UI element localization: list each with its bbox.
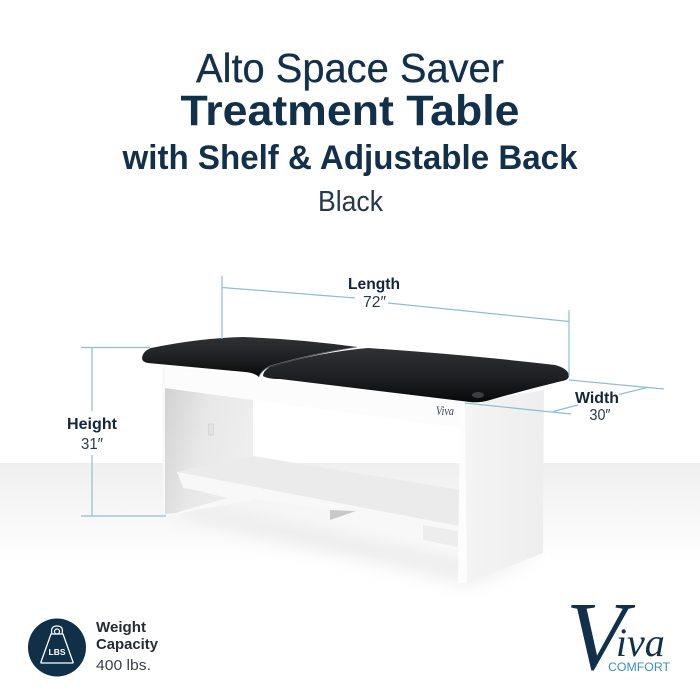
length dimension: [222, 276, 569, 376]
left leg inner face: [165, 388, 253, 514]
weight capacity: [28, 618, 159, 676]
wall plate: [208, 424, 214, 435]
logo script: V: [566, 583, 626, 691]
width dimension: [465, 380, 664, 424]
floor shadow: [175, 505, 540, 585]
title: [122, 45, 578, 218]
length value: 72″: [363, 294, 386, 311]
weight label: Weight: [96, 619, 146, 636]
brand logo: [566, 583, 670, 691]
height dimension: [67, 348, 166, 516]
right leg side face: [465, 390, 544, 583]
length lines: [222, 276, 569, 376]
right cushion: [263, 348, 569, 402]
left leg: [162, 366, 253, 516]
shelf front edge: [177, 472, 459, 547]
shelf block: [423, 525, 458, 547]
shelf support bracket: [330, 510, 356, 520]
title: Black: [318, 186, 383, 218]
height value: 31″: [81, 436, 103, 453]
title: Treatment Table: [180, 87, 520, 135]
weight value: 400 lbs.: [96, 657, 151, 674]
length label: Length: [348, 276, 400, 293]
treatment table: [142, 337, 569, 585]
title: Alto Space Saver: [196, 45, 504, 91]
width value: 30″: [590, 407, 611, 424]
shelf top: [177, 456, 460, 528]
logo comfort: COMFORT: [608, 662, 670, 674]
logo on apron: Viva: [436, 403, 454, 418]
icon: weight: LBS: [48, 647, 66, 657]
title: with Shelf & Adjustable Back: [122, 139, 578, 177]
right leg front edge: [458, 404, 467, 583]
height lines: [81, 348, 166, 516]
floor background: [0, 463, 700, 563]
height label: Height: [67, 416, 118, 433]
apron: [165, 366, 465, 428]
capacity label: Capacity: [96, 636, 159, 653]
cushion corner highlight: [472, 392, 484, 398]
width lines: [465, 380, 664, 414]
left cushion: [142, 337, 357, 377]
logo script: iva: [616, 620, 665, 665]
width label: Width: [575, 390, 619, 407]
cushion seam: [259, 347, 357, 376]
